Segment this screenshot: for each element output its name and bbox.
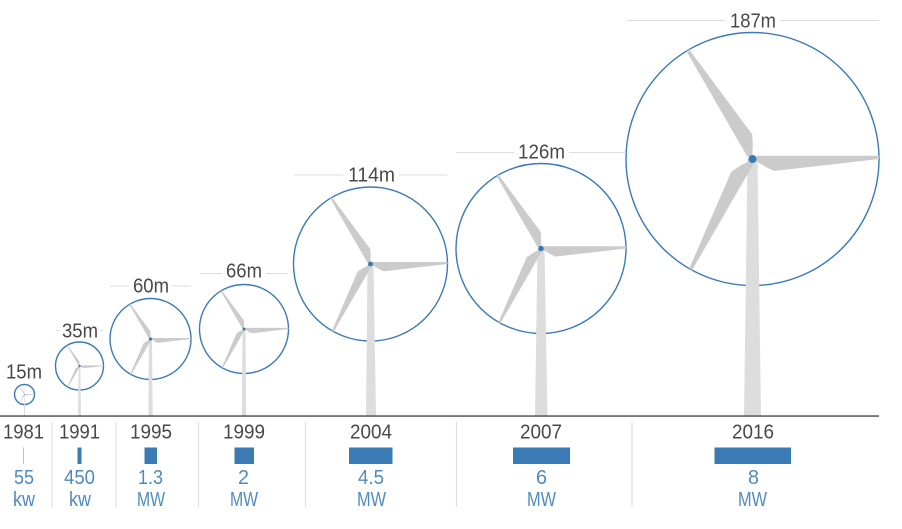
column 1999: 2 MW: 1999 <box>223 420 265 443</box>
diameter label: 126m: 126m <box>518 140 565 164</box>
column 1999: 2 MW: MW <box>230 488 258 511</box>
column 1981: 55 kw: kw <box>13 488 35 511</box>
diameter label: 66m: 66m <box>226 260 262 282</box>
column 1991: 450 kw: kw <box>69 488 91 511</box>
column 1999: 2 MW: 2 <box>238 466 249 489</box>
turbine 1991: 35m <box>56 342 104 416</box>
ground line <box>0 415 879 417</box>
column 2016: 8 MW: 8 <box>748 466 759 489</box>
column 2004: 4.5 MW: 4.5 <box>358 466 384 489</box>
diameter label: 60m: 60m <box>133 274 169 298</box>
column 1981: 55 kw: 1981 <box>3 420 44 443</box>
column 1991: 450 kw <box>59 420 100 511</box>
column 2004: 4.5 MW: 2004 <box>350 420 392 443</box>
column 2016: 8 MW <box>714 420 791 511</box>
column 2007: 6 MW <box>513 420 570 511</box>
column 2007: 6 MW: MW <box>527 488 557 511</box>
column 1995: 1.3 MW <box>130 420 172 511</box>
column separators <box>52 422 632 507</box>
turbine 2004: 114m <box>294 187 448 416</box>
diameter label: 187m: 187m <box>730 9 776 32</box>
column 1995: 1.3 MW: 1.3 <box>138 466 163 489</box>
turbine 1999: 66m <box>200 284 288 416</box>
diameter label: 66m <box>200 260 288 282</box>
column 1991: 450 kw: 450 <box>64 466 95 489</box>
column 2007: 6 MW: 2007 <box>520 420 562 443</box>
column 2004: 4.5 MW <box>349 420 392 511</box>
turbine 2007: 126m <box>456 164 626 416</box>
diameter label: 15m: 15m <box>6 360 42 384</box>
column 1995: 1.3 MW: 1995 <box>130 420 172 443</box>
column 1995: 1.3 MW: MW <box>137 488 165 511</box>
diameter label: 35m: 35m <box>62 320 98 342</box>
column 1981: 55 kw <box>3 420 44 511</box>
column 2004: 4.5 MW: MW <box>357 488 387 511</box>
column 2016: 8 MW: 2016 <box>732 420 774 443</box>
column 2016: 8 MW: MW <box>738 488 768 511</box>
column 1981: 55 kw: 55 <box>14 466 34 489</box>
turbine 2016: 187m <box>626 32 879 416</box>
turbine 1981: 15m <box>14 384 34 416</box>
column 1999: 2 MW <box>223 420 265 511</box>
diameter label: 114m: 114m <box>348 164 395 186</box>
column 2007: 6 MW: 6 <box>536 466 547 489</box>
diameter label: 60m <box>110 274 191 298</box>
turbine 1995: 60m <box>110 298 191 416</box>
column 1991: 450 kw: 1991 <box>59 420 100 443</box>
